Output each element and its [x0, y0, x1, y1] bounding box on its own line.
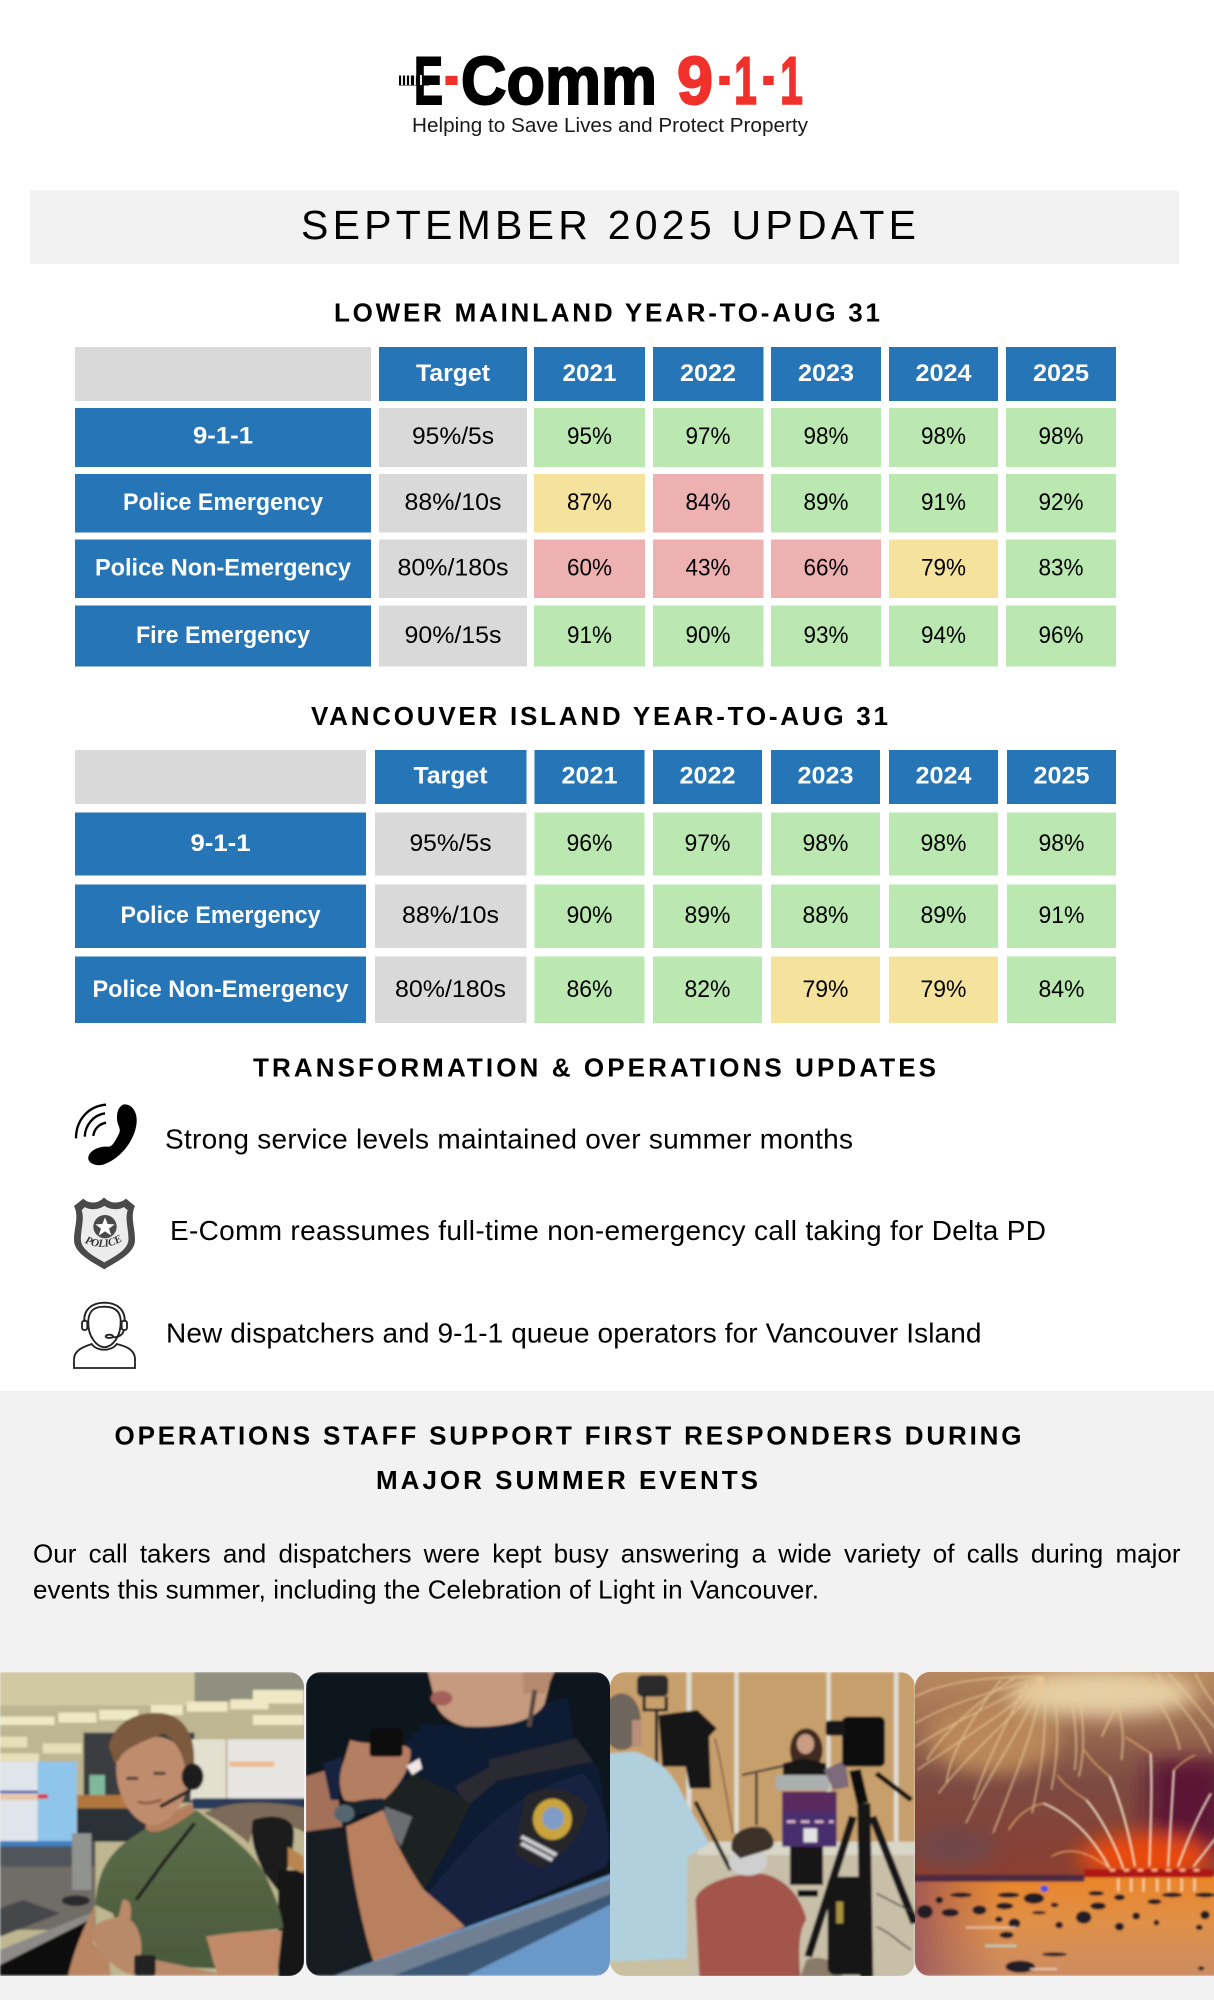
header row: Target	[416, 360, 490, 387]
row: fire emergency	[75, 606, 1116, 666]
row: 9-1-1: 9-1-1	[193, 422, 253, 450]
row: police non-emergency: 82%	[684, 976, 730, 1003]
body text	[33, 1538, 1181, 1604]
heading: lower mainland: LOWER MAINLAND YEAR-TO-AUG 31	[334, 298, 882, 328]
header row: 2021	[562, 762, 618, 790]
row: police non-emergency: 83%	[1038, 554, 1084, 582]
row: fire emergency: 90%	[686, 622, 730, 649]
row: police non-emergency: 84%	[1038, 976, 1084, 1003]
row: 9-1-1: 97%	[686, 423, 730, 450]
row: police emergency: 88%/10s	[404, 489, 502, 516]
row: police emergency: 89%	[804, 489, 848, 516]
row: 9-1-1: 98%	[1038, 423, 1084, 450]
heading: vancouver island: VANCOUVER ISLAND YEAR-TO-AUG 31	[311, 701, 890, 731]
icon: operator with headset	[74, 1303, 135, 1368]
row: police non-emergency: Police Non-Emergency	[92, 976, 349, 1003]
logo wordmark: E	[414, 43, 443, 119]
icon: police badge	[74, 1198, 135, 1270]
header row: 2025	[1033, 360, 1089, 387]
row: police non-emergency: 86%	[566, 976, 612, 1003]
row: 9-1-1: 98%	[920, 830, 966, 857]
heading: operations staff: OPERATIONS STAFF SUPPORT FIRST RESPONDERS DURING	[114, 1421, 1024, 1451]
header row: 2022	[680, 360, 736, 387]
table: vancouver island	[75, 750, 1116, 1023]
row: police emergency	[75, 884, 1116, 948]
header row	[75, 347, 1116, 401]
row: 9-1-1: 98%	[804, 423, 848, 450]
heading: operations staff	[114, 1421, 1024, 1495]
header row: 2023	[798, 360, 854, 387]
row: fire emergency: 93%	[804, 622, 848, 649]
row: 9-1-1: 98%	[921, 423, 966, 450]
logo wordmark: 1	[734, 43, 757, 119]
table: lower mainland	[75, 347, 1116, 666]
heading: transformation and operations updates: TRANSFORMATION & OPERATIONS UPDATES	[253, 1053, 938, 1083]
photo: police officer with radio	[305, 1672, 613, 1976]
row: police emergency: 89%	[684, 902, 730, 929]
logo wordmark: -	[718, 37, 731, 113]
row: police non-emergency: 43%	[686, 554, 730, 582]
icon: police badge: POLICE	[84, 1234, 122, 1247]
header row: Target	[414, 762, 488, 790]
row: police emergency: Police Emergency	[123, 489, 324, 516]
title banner: SEPTEMBER 2025 UPDATE	[301, 202, 916, 248]
title banner	[30, 190, 1179, 264]
row: fire emergency: 96%	[1038, 622, 1084, 649]
panel: major summer events	[0, 1391, 1214, 2000]
logo wordmark: -	[762, 37, 775, 113]
row: 9-1-1	[75, 812, 1116, 876]
row: police emergency: 88%/10s	[402, 902, 499, 929]
header row: 2024	[916, 360, 972, 387]
row: police emergency: 91%	[1038, 902, 1084, 929]
header row	[75, 750, 1116, 804]
logo wordmark: -	[444, 37, 459, 113]
row: 9-1-1: 95%	[567, 423, 612, 450]
row: police non-emergency	[75, 956, 1116, 1023]
logo wordmark	[399, 37, 803, 119]
row: police emergency: 92%	[1038, 489, 1084, 516]
logo wordmark: 9	[677, 43, 713, 119]
row: police non-emergency: 60%	[567, 554, 612, 582]
photo: call taker with headset	[0, 1672, 307, 1977]
row: police emergency	[75, 474, 1116, 532]
row: police non-emergency: 80%/180s	[398, 554, 508, 582]
row: fire emergency: Fire Emergency	[136, 622, 311, 649]
row: 9-1-1: 95%/5s	[412, 423, 494, 450]
header row: 2025	[1034, 762, 1090, 790]
row: 9-1-1: 97%	[684, 830, 730, 857]
logo wordmark: Comm	[461, 43, 657, 119]
header row: 2021	[562, 360, 616, 387]
row: police emergency: 90%	[566, 902, 612, 929]
row: fire emergency: 90%/15s	[404, 622, 502, 649]
bullet: service levels: Strong service levels maintained over summer months	[165, 1123, 853, 1154]
row: 9-1-1: 98%	[802, 830, 848, 857]
row: 9-1-1: 98%	[1038, 830, 1084, 857]
header row: 2024	[916, 762, 972, 790]
row: 9-1-1: 95%/5s	[410, 830, 492, 857]
row: 9-1-1: 96%	[566, 830, 612, 857]
body text: events this summer, including the Celebration of Light in Vancouver.	[33, 1574, 819, 1604]
heading: operations staff: MAJOR SUMMER EVENTS	[376, 1465, 760, 1495]
header row: 2023	[798, 762, 854, 790]
photo: press conference	[602, 1672, 915, 1977]
bullet: new dispatchers: New dispatchers and 9-1-1 queue operators for Vancouver Island	[166, 1318, 982, 1349]
row: police non-emergency: 80%/180s	[395, 976, 506, 1003]
body text: Our call takers and dispatchers were kept busy answering a wide variety of calls during major	[33, 1538, 1181, 1568]
icon: phone with signal	[76, 1104, 137, 1165]
row: police emergency: 88%	[802, 902, 848, 929]
row: police non-emergency: Police Non-Emergency	[95, 554, 352, 582]
row: police non-emergency: 79%	[920, 976, 966, 1003]
row: 9-1-1	[75, 408, 1116, 467]
logo tagline: Helping to Save Lives and Protect Property	[412, 115, 808, 137]
row: police emergency: 89%	[920, 902, 966, 929]
row: police emergency: 87%	[567, 489, 612, 516]
logo wordmark: 1	[780, 43, 803, 119]
row: police non-emergency: 79%	[802, 976, 848, 1003]
row: police non-emergency	[75, 540, 1116, 598]
row: police non-emergency: 66%	[804, 554, 848, 582]
row: fire emergency: 91%	[567, 622, 612, 649]
row: police emergency: Police Emergency	[120, 902, 321, 929]
row: police non-emergency: 79%	[921, 554, 966, 582]
bullet: delta pd: E-Comm reassumes full-time non-emergency call taking for Delta PD	[170, 1215, 1046, 1246]
row: police emergency: 91%	[921, 489, 966, 516]
row: fire emergency: 94%	[921, 622, 966, 649]
logo	[399, 37, 808, 137]
photo: fireworks over english bay	[911, 1670, 1214, 1976]
header row: 2022	[680, 762, 736, 790]
row: 9-1-1: 9-1-1	[190, 830, 250, 857]
row: police emergency: 84%	[686, 489, 730, 516]
